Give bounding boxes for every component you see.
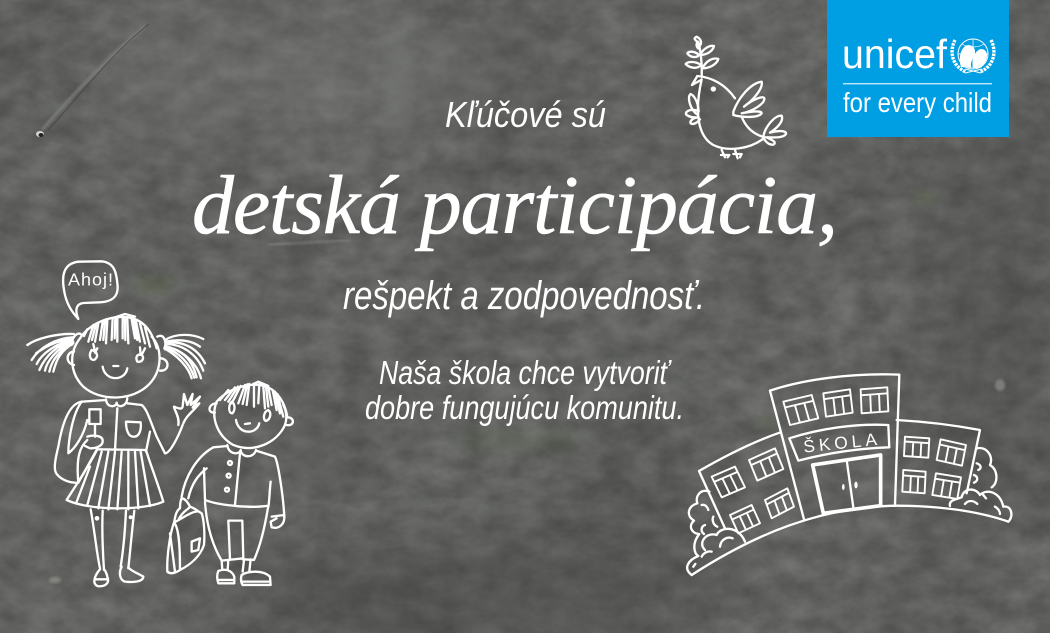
logo divider bbox=[843, 83, 992, 84]
boy hand bbox=[271, 515, 284, 528]
boy head bbox=[214, 402, 286, 448]
body line 2: dobre fungujúcu komunitu. bbox=[365, 389, 684, 426]
school ground arc bbox=[692, 506, 1008, 575]
school windows bbox=[712, 387, 966, 533]
boy fringe bbox=[220, 382, 283, 417]
body line 1: Naša škola chce vytvoriť bbox=[379, 354, 672, 391]
girl right pigtail bbox=[164, 335, 205, 378]
school door bbox=[813, 455, 881, 513]
illustration: school building bbox=[687, 374, 1011, 575]
boy ears bbox=[210, 403, 293, 425]
girl pleated skirt bbox=[67, 450, 163, 509]
left bush bbox=[687, 491, 745, 575]
dove tail bbox=[763, 116, 786, 145]
boy torso bbox=[182, 446, 284, 517]
logo tagline: for every child bbox=[843, 87, 992, 118]
girl ears bbox=[68, 352, 167, 371]
boy shoes bbox=[217, 559, 271, 585]
girl eyes bbox=[90, 344, 145, 362]
icon: dove with olive branch bbox=[686, 37, 786, 158]
dove feet bbox=[721, 150, 742, 158]
girl waving hand bbox=[174, 394, 200, 425]
school left wing bbox=[699, 432, 781, 528]
intro line: Kľúčové sú bbox=[445, 94, 606, 135]
girl fringe bbox=[84, 314, 150, 347]
boy collar bbox=[227, 445, 256, 456]
speech bubble bbox=[63, 261, 118, 319]
backpack bbox=[68, 402, 103, 483]
girl collar bbox=[106, 398, 127, 406]
girl head bbox=[72, 337, 160, 398]
logo emblem bbox=[952, 39, 994, 73]
school sign: ŠKOLA bbox=[802, 429, 882, 457]
dove body bbox=[692, 76, 765, 149]
speech bubble: Ahoj! bbox=[68, 270, 114, 290]
boy trousers bbox=[205, 502, 268, 561]
girl smile bbox=[103, 366, 127, 378]
logo: UNICEF bbox=[827, 0, 1009, 137]
subheading: rešpekt a zodpovednosť. bbox=[343, 274, 705, 318]
school central block bbox=[770, 374, 899, 519]
main heading: detská participácia, bbox=[192, 159, 838, 252]
girl pocket bbox=[126, 422, 141, 437]
girl shoes bbox=[94, 567, 143, 586]
girl torso and placket bbox=[55, 400, 183, 483]
girl bbox=[27, 314, 205, 586]
school right wing bbox=[897, 420, 980, 493]
right bush bbox=[950, 448, 1011, 522]
school sign bbox=[789, 425, 889, 461]
boy eyes and smile bbox=[229, 402, 270, 432]
olive branch bbox=[686, 37, 718, 77]
dove small wing bbox=[686, 94, 700, 124]
briefcase bbox=[167, 498, 204, 573]
girl left pigtail bbox=[27, 334, 74, 372]
body text bbox=[365, 354, 684, 426]
girl legs bbox=[91, 509, 134, 570]
girl hair ties bbox=[72, 334, 165, 349]
dove wing bbox=[733, 82, 764, 117]
logo wordmark: unicef bbox=[842, 31, 948, 77]
illustration: girl and boy bbox=[27, 261, 293, 586]
boy bbox=[167, 382, 293, 585]
